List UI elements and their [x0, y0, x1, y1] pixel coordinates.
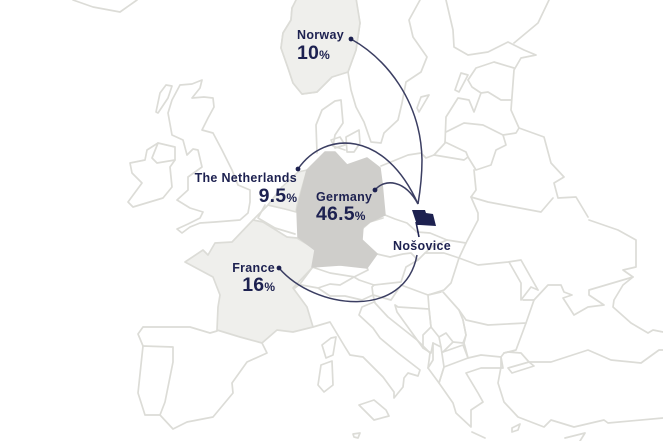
- label: Germany: 46.5%: [316, 203, 366, 225]
- label: Norway: 10%: [297, 42, 330, 64]
- label: France: France: [232, 261, 275, 275]
- label: Germany: [316, 190, 372, 225]
- arc: The Netherlands to Nošovice: [296, 143, 418, 204]
- label: The Netherlands: 9.5%: [259, 185, 297, 207]
- country: Germany: [297, 152, 385, 268]
- country: Norway: [281, 0, 360, 94]
- country: The Netherlands: [268, 170, 307, 212]
- arc: Germany to Nošovice: [373, 183, 418, 204]
- label: Norway: Norway: [297, 28, 344, 42]
- label: The Netherlands: The Netherlands: [195, 171, 297, 185]
- label: Norway: [297, 28, 344, 64]
- label: France: [232, 261, 275, 296]
- label: France: 16%: [242, 274, 275, 296]
- label: The Netherlands: [195, 171, 297, 207]
- label: Nošovice: Nošovice: [393, 239, 451, 253]
- arc: France to Nošovice: [277, 255, 417, 302]
- label: Germany: Germany: [316, 190, 372, 204]
- arc: Norway to Nošovice: [349, 37, 422, 204]
- country: France: [185, 220, 317, 343]
- icon: flag at Nošovice: [412, 210, 436, 237]
